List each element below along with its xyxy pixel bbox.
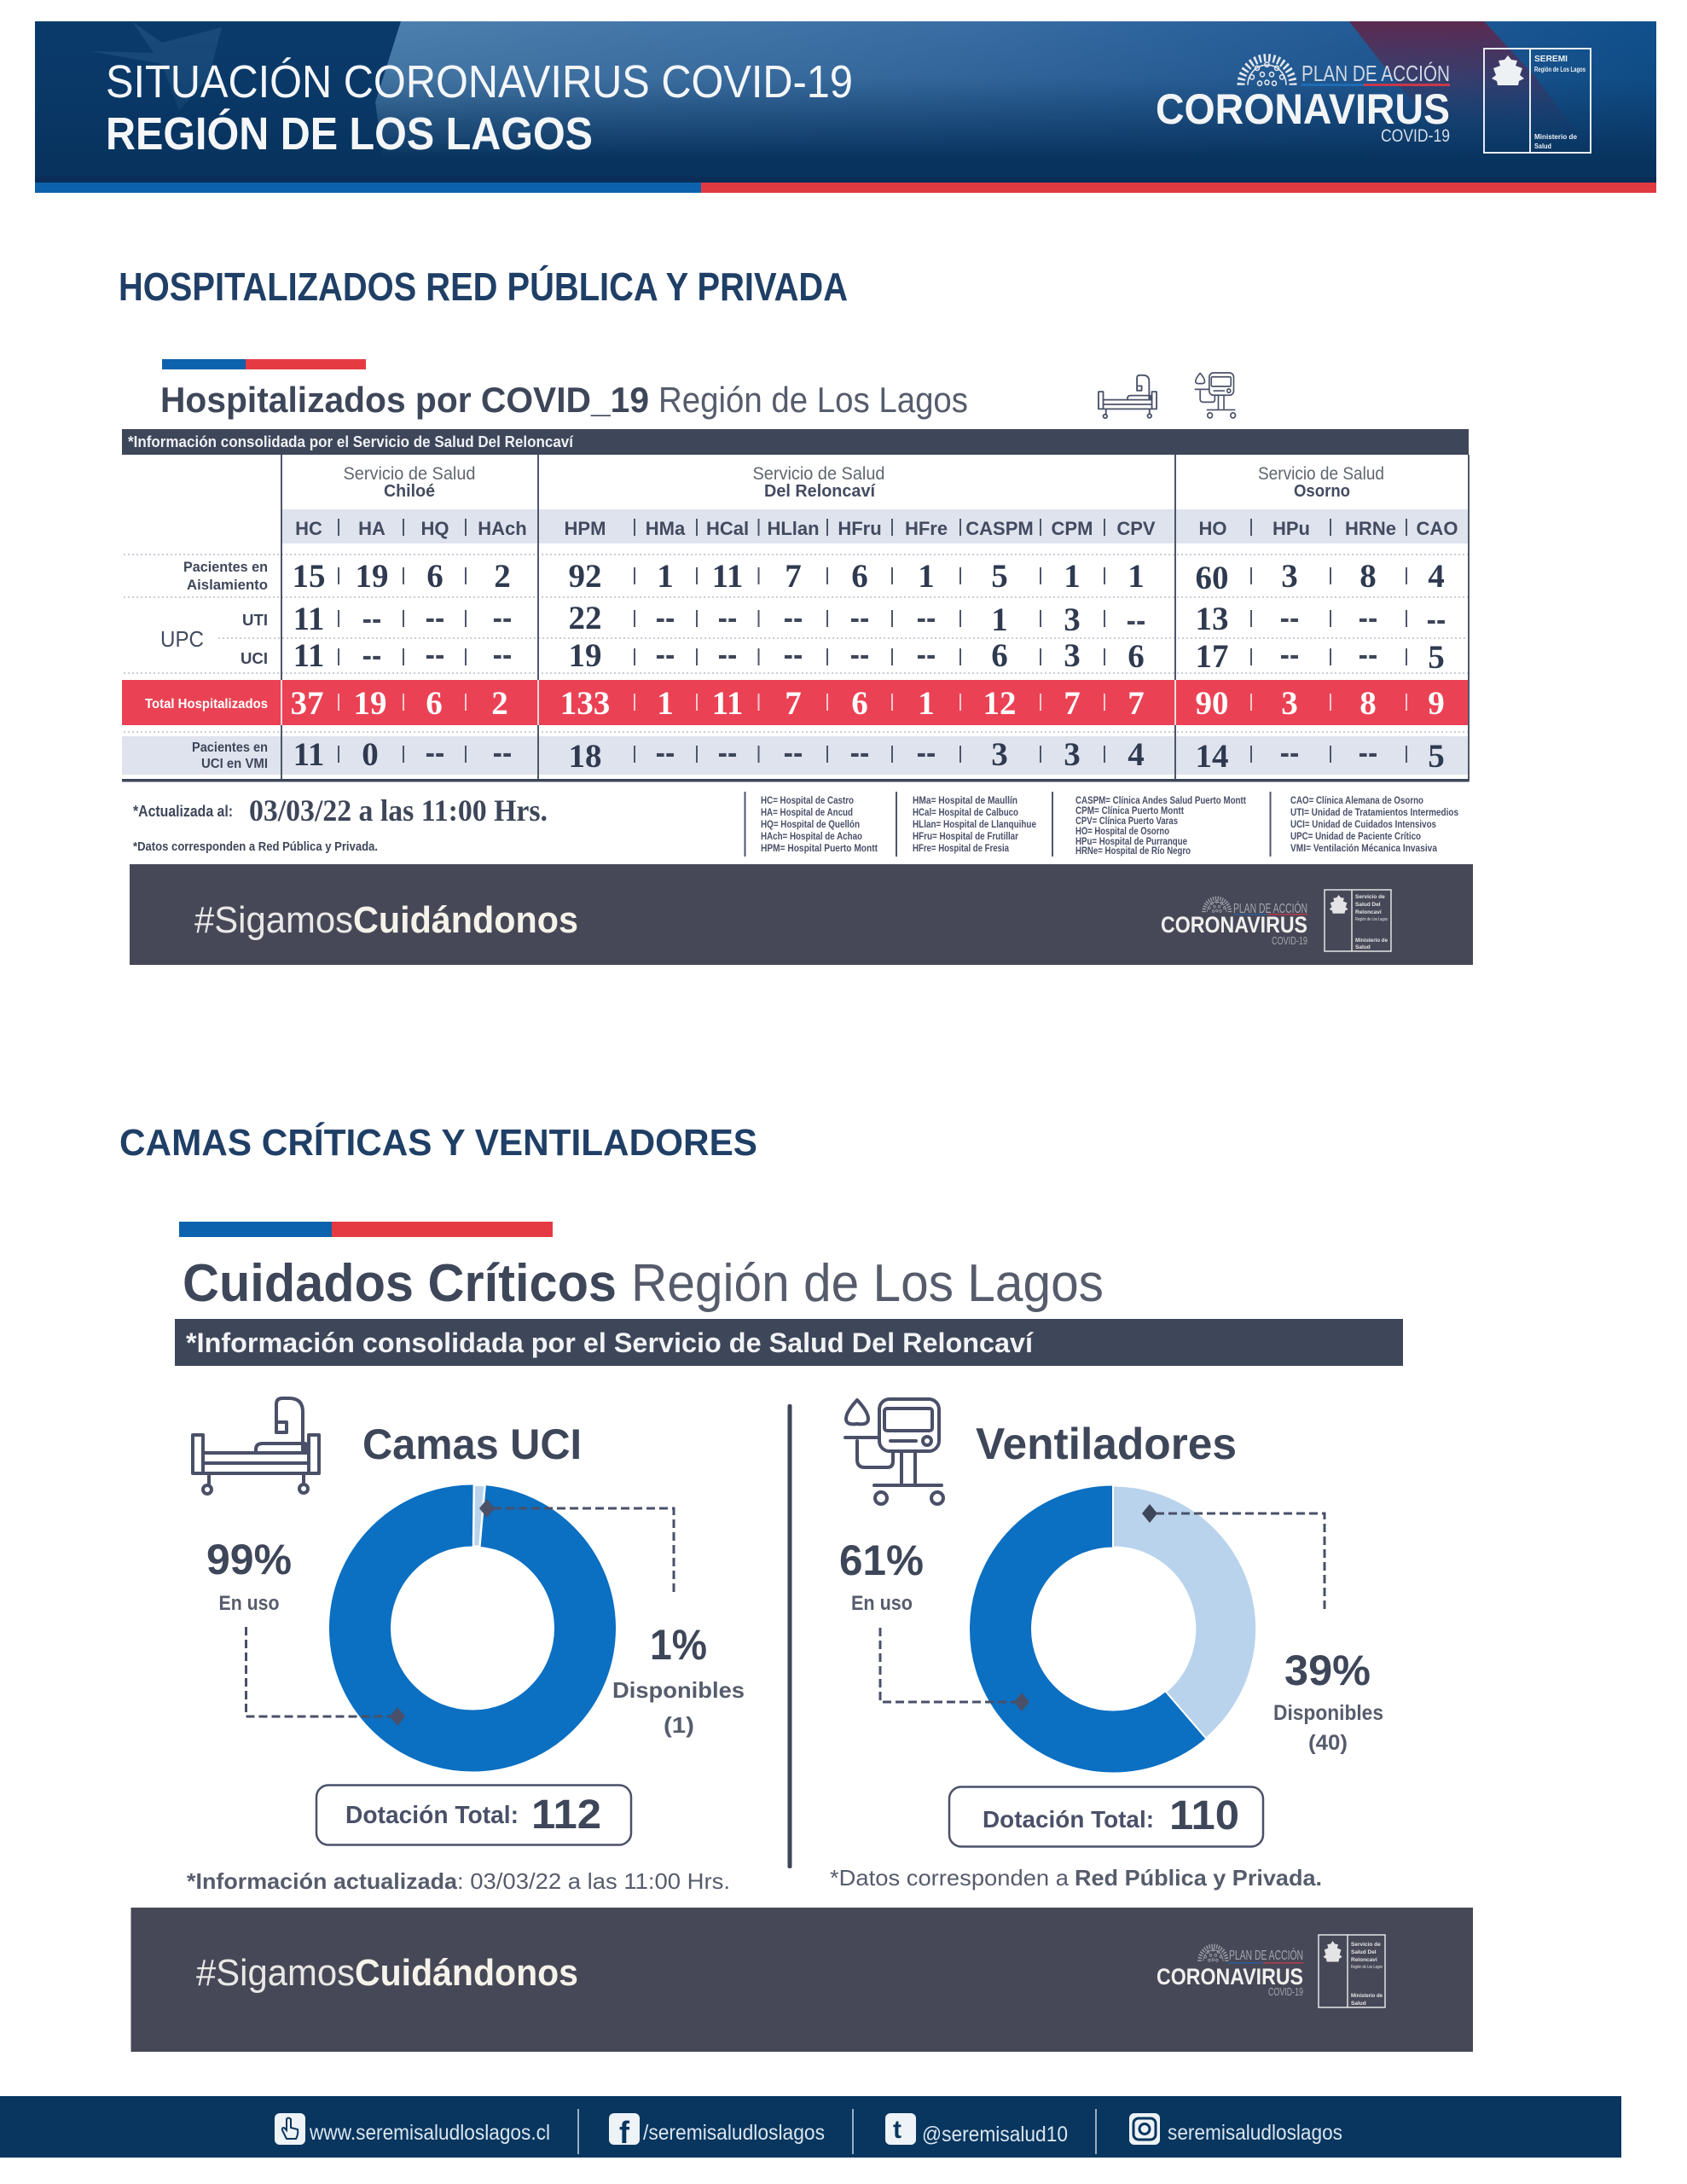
- label: ventiladores: Ventiladores: [976, 1420, 1237, 1469]
- banner title: [106, 56, 853, 160]
- legend: hospital abbreviations: HFre= Hospital de Fresia: [913, 844, 1010, 854]
- banner logo: seremi box: Región de Los Lagos: [1534, 66, 1586, 73]
- row: UCI: --: [1359, 639, 1377, 671]
- row: pacientes en UCI en VMI: 18: [568, 738, 602, 775]
- small logo: servicio de salud box: Salud: [1351, 2001, 1366, 2007]
- row: pacientes en UCI en VMI: 0: [362, 736, 379, 773]
- row: pacientes en aislamiento: 6: [426, 558, 443, 595]
- row: pacientes en aislamiento: 1: [1064, 558, 1081, 595]
- row: UTI: 13: [1196, 601, 1228, 637]
- row: pacientes en UCI en VMI: 3: [1064, 736, 1081, 773]
- callout: 99% en uso: En uso: [218, 1592, 280, 1615]
- row: UCI: 3: [1064, 637, 1081, 674]
- hospital column codes: [295, 518, 1458, 539]
- row: UCI: 5: [1428, 639, 1445, 676]
- contact: facebook: /seremisaludloslagos: [643, 2121, 825, 2145]
- legend: hospital abbreviations: CPM= Clínica Puerto Montt: [1075, 806, 1184, 816]
- row: UCI: [241, 637, 1445, 676]
- row: UTI: --: [362, 603, 381, 636]
- row: pacientes en aislamiento: 6: [851, 558, 868, 595]
- total box: 110: [949, 1786, 1263, 1846]
- small logo: servicio de salud box: Servicio de: [1351, 1942, 1381, 1948]
- row: UCI: --: [917, 639, 936, 671]
- row: pacientes en UCI en VMI: 11: [293, 736, 324, 773]
- small logo: coronavirus: COVID-19: [1268, 1985, 1303, 1998]
- accent strip: [179, 1222, 553, 1237]
- row: pacientes en aislamiento: 11: [712, 558, 743, 595]
- heading: camas críticas: CAMAS CRÍTICAS Y VENTILADORES: [119, 1121, 757, 1164]
- small logo: servicio de salud box: Salud: [1355, 944, 1371, 950]
- row: UTI: --: [784, 602, 803, 635]
- row: pacientes en UCI en VMI: Pacientes en: [192, 741, 268, 755]
- legend: hospital abbreviations: HPu= Hospital de Purranque: [1075, 837, 1187, 847]
- service header: Osorno: Servicio de Salud: [1258, 464, 1384, 484]
- row: UTI: --: [718, 602, 737, 635]
- service header: Chiloé: [343, 464, 476, 501]
- subpanel: ventiladores: [830, 1399, 1383, 1891]
- footer bar: sigamos cuidándonos: [130, 864, 1473, 965]
- row: total hospitalizados: 11: [712, 685, 743, 722]
- service header: Chiloé: Servicio de Salud: [343, 464, 476, 484]
- row: pacientes en aislamiento: 15: [292, 558, 326, 595]
- legend: hospital abbreviations: HRNe= Hospital de Río Negro: [1075, 846, 1191, 857]
- banner: [35, 21, 1656, 193]
- small logo: coronavirus: PLAN DE ACCIÓN: [1229, 1947, 1303, 1963]
- table title: [160, 380, 968, 420]
- row: UTI: --: [493, 602, 512, 635]
- row: total hospitalizados: 7: [1128, 685, 1145, 722]
- hospital column codes: HA: [358, 518, 386, 539]
- legend: hospital abbreviations: UTI= Unidad de Tratamientos Intermedios: [1290, 808, 1458, 818]
- row: UTI: UTI: [242, 612, 268, 629]
- panel: cuidados críticos: [131, 1222, 1473, 2052]
- total box: 110: 110: [1169, 1793, 1239, 1838]
- row: pacientes en UCI en VMI: UCI en VMI: [201, 757, 268, 771]
- row: pacientes en UCI en VMI: --: [917, 737, 936, 770]
- icon: facebook: [609, 2113, 640, 2150]
- note: datos corresponden: *Datos corresponden a: [830, 1865, 1070, 1891]
- icon: instagram: [1129, 2113, 1160, 2145]
- small logo: servicio de salud box: Ministerio de: [1351, 1993, 1383, 1999]
- legend: hospital abbreviations: HC= Hospital de Castro: [761, 796, 854, 806]
- icon: ventilator: [845, 1399, 943, 1504]
- update note: [133, 793, 548, 854]
- row: pacientes en aislamiento: 92: [568, 558, 602, 595]
- row: UCI: --: [362, 640, 381, 672]
- row: pacientes en aislamiento: 5: [991, 558, 1008, 595]
- banner logo: seremi box: [1484, 49, 1591, 153]
- row: UCI: --: [1280, 639, 1299, 671]
- service header: Chiloé: Chiloé: [384, 482, 435, 501]
- banner title: SITUACIÓN CORONAVIRUS COVID-19: [106, 56, 853, 107]
- legend: hospital abbreviations: UCI= Unidad de Cuidados Intensivos: [1290, 820, 1436, 830]
- row: UTI: 22: [568, 600, 602, 636]
- row: pacientes en aislamiento: [183, 558, 1445, 596]
- banner stripe red: [701, 183, 1656, 193]
- small logo: servicio de salud box: Salud Del: [1355, 902, 1381, 908]
- banner logo: plan de acción coronavirus: CORONAVIRUS: [1156, 85, 1450, 133]
- row: total hospitalizados: 90: [1196, 685, 1228, 722]
- info bar: *Información consolidada por el Servicio de Salud Del Reloncaví: [186, 1327, 1034, 1358]
- hospital column codes: HMa: [646, 518, 686, 539]
- callout: 1% disponibles: [479, 1499, 745, 1738]
- callout: 39% disponibles: (40): [1308, 1731, 1348, 1755]
- icon: tumblr: [885, 2113, 916, 2145]
- small logo: servicio de salud box: Ministerio de: [1355, 938, 1388, 944]
- small logo: servicio de salud box: [1325, 890, 1391, 951]
- icon: ventilator small: [1195, 373, 1236, 418]
- note: datos corresponden: [830, 1865, 1322, 1891]
- total box: 110: Dotación Total:: [983, 1806, 1154, 1833]
- hospital column codes: HLlan: [767, 518, 820, 539]
- donut chart: camas UCI: [360, 1484, 585, 1740]
- info bar: [175, 1319, 1403, 1366]
- row: UCI: --: [656, 639, 675, 671]
- hospital column codes: HQ: [421, 518, 449, 539]
- total box: 112: [316, 1785, 631, 1844]
- service header: Osorno: Osorno: [1294, 482, 1350, 501]
- row: pacientes en aislamiento: 1: [1128, 558, 1145, 595]
- banner stripe blue: [35, 183, 701, 193]
- row: pacientes en aislamiento: 4: [1428, 558, 1445, 595]
- info bar: *Información consolidada por el Servicio de Salud Del Reloncaví: [128, 433, 574, 450]
- row: pacientes en UCI en VMI: [192, 736, 1445, 775]
- note: información actualizada: : 03/03/22 a las 11:00 Hrs.: [457, 1868, 730, 1894]
- contact: twitter handle: @seremisalud10: [922, 2123, 1068, 2146]
- callout: 1% disponibles: 1%: [650, 1621, 707, 1669]
- update note: 03/03/22 a las 11:00 Hrs.: [249, 793, 548, 828]
- small logo: servicio de salud box: [1319, 1935, 1385, 2007]
- row: total hospitalizados: 1: [657, 685, 674, 722]
- callout: 39% disponibles: [1142, 1504, 1383, 1755]
- callout: 61% en uso: En uso: [851, 1592, 913, 1615]
- row: pacientes en aislamiento: 1: [918, 558, 935, 595]
- row: total hospitalizados: 7: [1064, 685, 1081, 722]
- update note: *Actualizada al:: [133, 803, 233, 820]
- legend: hospital abbreviations: CASPM= Clínica Andes Salud Puerto Montt: [1075, 796, 1246, 806]
- legend: hospital abbreviations: HLlan= Hospital de Llanquihue: [913, 820, 1036, 830]
- small logo: servicio de salud box: Servicio de: [1355, 894, 1385, 900]
- row: UCI: 6: [1128, 638, 1145, 675]
- icon: bed small: [1099, 375, 1157, 418]
- hospital column codes: HPu: [1272, 518, 1310, 539]
- legend: hospital abbreviations: HFru= Hospital de Frutillar: [913, 832, 1018, 842]
- legend: hospital abbreviations: HA= Hospital de Ancud: [761, 808, 853, 818]
- row: pacientes en UCI en VMI: 4: [1128, 736, 1145, 773]
- row: UCI: --: [426, 639, 444, 671]
- total band: [122, 680, 1469, 725]
- legend: hospital abbreviations: HO= Hospital de Osorno: [1075, 827, 1169, 837]
- row: pacientes en UCI en VMI: 14: [1196, 738, 1228, 775]
- banner logo: plan de acción coronavirus: PLAN DE ACCIÓN: [1301, 61, 1450, 86]
- legend: hospital abbreviations: VMI= Ventilación Mécanica Invasiva: [1290, 844, 1438, 854]
- legend: hospital abbreviations: UPC= Unidad de Paciente Crítico: [1290, 832, 1421, 842]
- accent strip: [162, 359, 366, 369]
- row: total hospitalizados: 6: [851, 685, 868, 722]
- legend: hospital abbreviations: HAch= Hospital de Achao: [761, 832, 862, 842]
- small logo: coronavirus: CORONAVIRUS: [1161, 912, 1307, 938]
- table title: Región de Los Lagos: [658, 380, 968, 420]
- small logo: servicio de salud box: Región de Los Lagos: [1355, 917, 1388, 922]
- footer bar: sigamos cuidándonos: #Sigamos: [196, 1952, 355, 1994]
- banner logo: seremi box: Salud: [1534, 142, 1551, 150]
- row: UCI: --: [784, 639, 803, 671]
- donut chart: ventiladores: [1000, 1485, 1256, 1742]
- small logo: servicio de salud box: Reloncaví: [1355, 909, 1382, 915]
- row: pacientes en UCI en VMI: --: [656, 737, 675, 770]
- row: total hospitalizados: 37: [290, 685, 324, 722]
- row: UTI: --: [917, 602, 936, 635]
- hospital column codes: HCal: [706, 518, 749, 539]
- contact: website: www.seremisaludloslagos.cl: [309, 2121, 550, 2145]
- heading: hospitalizados: HOSPITALIZADOS RED PÚBLICA Y PRIVADA: [119, 264, 848, 309]
- row: pacientes en aislamiento: 2: [494, 558, 511, 595]
- row: UTI: --: [1280, 602, 1299, 635]
- row: UCI: 17: [1196, 638, 1228, 675]
- row: pacientes en aislamiento: Pacientes en: [183, 559, 268, 575]
- banner logo: seremi box: Ministerio de: [1534, 133, 1578, 141]
- small logo: servicio de salud box: Reloncaví: [1351, 1957, 1377, 1963]
- total box: 112: Dotación Total:: [345, 1802, 519, 1829]
- row: pacientes en UCI en VMI: --: [784, 737, 803, 770]
- row: pacientes en UCI en VMI: --: [426, 737, 444, 770]
- table title: Hospitalizados por COVID_19: [160, 380, 649, 420]
- row: UCI: 19: [568, 637, 602, 674]
- hospital column codes: HFre: [905, 518, 948, 539]
- row: pacientes en aislamiento: 1: [657, 558, 674, 595]
- small logo: coronavirus: [1157, 1946, 1303, 1998]
- row: total hospitalizados: 19: [353, 685, 387, 722]
- row: UCI: UCI: [241, 650, 268, 667]
- row: pacientes en aislamiento: 3: [1281, 558, 1298, 595]
- row: UCI: --: [850, 639, 869, 671]
- hospital column codes: HPM: [565, 518, 606, 539]
- row: pacientes en aislamiento: 19: [355, 558, 389, 595]
- note: información actualizada: [187, 1868, 730, 1894]
- row: pacientes en UCI en VMI: --: [1280, 737, 1299, 770]
- row: total hospitalizados: Total Hospitalizados: [145, 697, 268, 712]
- footer bar: sigamos cuidándonos: Cuidándonos: [353, 899, 578, 941]
- small logo: coronavirus: CORONAVIRUS: [1157, 1964, 1303, 1989]
- hospital column codes: CPV: [1116, 518, 1156, 539]
- row: pacientes en aislamiento: 7: [785, 558, 802, 595]
- panel title: [183, 1254, 1104, 1313]
- row: total hospitalizados: 3: [1281, 685, 1298, 722]
- callout: 99% en uso: [206, 1536, 405, 1726]
- panel title: Cuidados Críticos: [183, 1254, 617, 1313]
- row: UTI: 11: [293, 601, 324, 637]
- icon: facebook: f: [619, 2115, 630, 2150]
- service header: Del Reloncaví: [752, 464, 885, 501]
- row: total hospitalizados: 2: [491, 685, 508, 722]
- row: total hospitalizados: 9: [1428, 685, 1445, 722]
- note: información actualizada: *Información actualizada: [187, 1868, 458, 1894]
- row: total hospitalizados: 133: [560, 685, 610, 722]
- service header: Osorno: [1258, 464, 1384, 501]
- contact: instagram: seremisaludloslagos: [1168, 2121, 1342, 2145]
- callout: 61% en uso: [839, 1536, 1029, 1711]
- row: UTI: --: [1359, 602, 1377, 635]
- update note: *Datos corresponden a Red Pública y Privada.: [133, 839, 378, 854]
- row: pacientes en UCI en VMI: 5: [1428, 738, 1445, 775]
- row: UCI: --: [718, 639, 737, 671]
- row: UCI: --: [493, 639, 512, 671]
- hospital column codes: CAO: [1417, 518, 1458, 539]
- note: datos corresponden: Red Pública y Privada.: [1075, 1865, 1322, 1891]
- legend: hospital abbreviations: HCal= Hospital de Calbuco: [913, 808, 1018, 818]
- column sub-header band: [281, 509, 1469, 543]
- hospital column codes: HAch: [478, 518, 527, 539]
- divider between charts: [788, 1404, 791, 1868]
- row: pacientes en UCI en VMI: 3: [991, 736, 1008, 773]
- row: pacientes en aislamiento: 60: [1196, 560, 1228, 596]
- label: UPC: UPC: [160, 626, 204, 652]
- legend: hospital abbreviations: CAO= Clínica Alemana de Osorno: [1290, 796, 1423, 806]
- row: total hospitalizados: [145, 685, 1445, 722]
- banner logo: plan de acción coronavirus: COVID-19: [1381, 126, 1450, 146]
- service header: Del Reloncaví: Servicio de Salud: [752, 464, 885, 484]
- hospital column codes: HRNe: [1345, 518, 1396, 539]
- hospital column codes: HO: [1199, 518, 1226, 539]
- callout: 61% en uso: 61%: [839, 1536, 924, 1584]
- panel: hospitalizados table: [122, 359, 1473, 965]
- row: UTI: 1: [991, 601, 1008, 638]
- row: UTI: 3: [1064, 601, 1081, 638]
- legend: hospital abbreviations: [745, 792, 1458, 857]
- small logo: coronavirus: [1161, 898, 1307, 947]
- callout: 1% disponibles: Disponibles: [612, 1677, 745, 1703]
- service header: Del Reloncaví: Del Reloncaví: [764, 482, 876, 501]
- icon: bed: [193, 1398, 319, 1494]
- icon: tumblr: t: [893, 2116, 901, 2144]
- info bar: [122, 429, 1469, 455]
- row: pacientes en UCI en VMI: --: [850, 737, 869, 770]
- hospital column codes: CPM: [1052, 518, 1093, 539]
- small logo: coronavirus: PLAN DE ACCIÓN: [1233, 900, 1307, 916]
- small logo: servicio de salud box: Salud Del: [1351, 1949, 1377, 1955]
- row: pacientes en UCI en VMI: --: [718, 737, 737, 770]
- row: UCI: 11: [293, 637, 324, 674]
- row: pacientes en UCI en VMI: --: [493, 737, 512, 770]
- banner title: REGIÓN DE LOS LAGOS: [106, 108, 593, 160]
- contact footer: [0, 2096, 1621, 2158]
- footer bar: sigamos cuidándonos: Cuidándonos: [355, 1952, 578, 1994]
- legend: hospital abbreviations: HMa= Hospital de Maullín: [913, 796, 1017, 806]
- hospital column codes: CASPM: [965, 518, 1034, 539]
- callout: 99% en uso: 99%: [206, 1536, 292, 1583]
- row: total hospitalizados: 12: [983, 685, 1017, 722]
- legend: hospital abbreviations: HPM= Hospital Puerto Montt: [761, 844, 878, 854]
- banner logo: seremi box: SEREMI: [1534, 55, 1568, 64]
- row: UTI: [242, 600, 1446, 638]
- row: total hospitalizados: 6: [426, 685, 443, 722]
- hospital column codes: HFru: [838, 518, 882, 539]
- row: UTI: --: [850, 602, 869, 635]
- banner logo: plan de acción coronavirus: [1156, 58, 1450, 146]
- footer bar: sigamos cuidándonos: #Sigamos: [194, 899, 353, 941]
- row: total hospitalizados: 8: [1359, 685, 1377, 722]
- small logo: coronavirus: COVID-19: [1272, 934, 1307, 947]
- small logo: servicio de salud box: Región de Los Lagos: [1351, 1965, 1383, 1970]
- row: UTI: --: [1427, 604, 1446, 636]
- callout: 39% disponibles: Disponibles: [1273, 1701, 1383, 1725]
- row: pacientes en aislamiento: 8: [1359, 558, 1377, 595]
- callout: 39% disponibles: 39%: [1284, 1647, 1371, 1694]
- banner background: [35, 21, 1656, 193]
- panel title: Región de Los Lagos: [631, 1254, 1104, 1313]
- row: UTI: --: [1127, 605, 1145, 637]
- row: UTI: --: [656, 602, 675, 635]
- row: total hospitalizados: 1: [918, 685, 935, 722]
- label: camas UCI: Camas UCI: [362, 1420, 582, 1468]
- legend: hospital abbreviations: CPV= Clínica Puerto Varas: [1075, 816, 1178, 827]
- total box: 112: 112: [531, 1792, 601, 1838]
- row: UCI: 6: [991, 637, 1008, 674]
- legend: hospital abbreviations: HQ= Hospital de Quellón: [761, 820, 860, 830]
- hospital column codes: HC: [295, 518, 322, 539]
- icon: website: [275, 2113, 305, 2145]
- vmi band: [122, 736, 1469, 775]
- subpanel: camas UCI: [187, 1398, 745, 1894]
- row: total hospitalizados: 7: [785, 685, 802, 722]
- footer bar: sigamos cuidándonos: [131, 1908, 1473, 2052]
- callout: 1% disponibles: (1): [664, 1712, 694, 1738]
- row: pacientes en aislamiento: Aislamiento: [187, 577, 268, 593]
- row: UTI: --: [426, 602, 444, 635]
- row: pacientes en UCI en VMI: --: [1359, 737, 1377, 770]
